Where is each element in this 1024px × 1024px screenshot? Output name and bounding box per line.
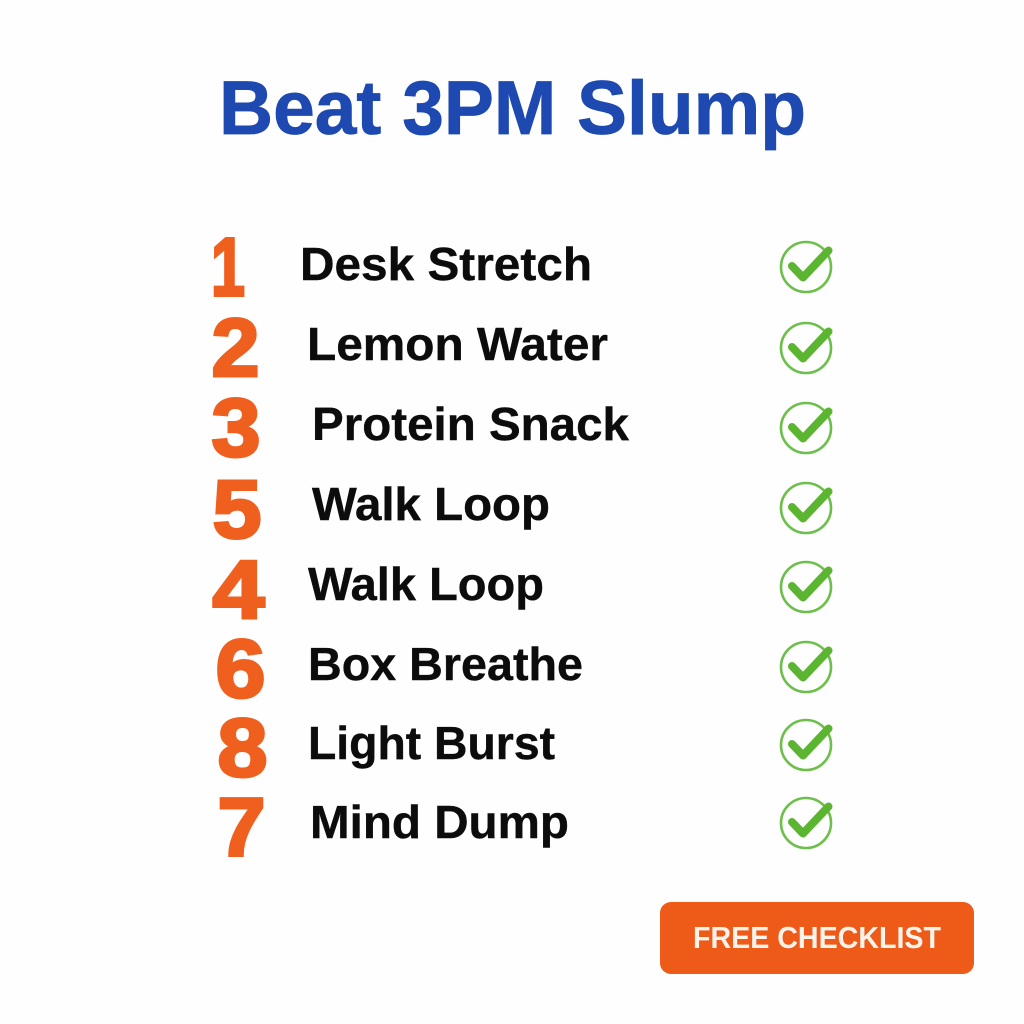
list row 8: Mind Dump: 7 (218, 780, 266, 874)
list row 7: Light Burst: Light Burst (308, 717, 555, 769)
button: free checklist (660, 902, 974, 974)
list row 4: Walk Loop: Walk Loop (312, 478, 550, 530)
list row 2: Lemon Water (212, 301, 831, 394)
list row 7: Light Burst: 8 (218, 701, 268, 794)
list row 3: Protein Snack: Protein Snack (312, 398, 629, 450)
title: Beat 3PM Slump (219, 66, 806, 151)
list row 3: Protein Snack (212, 381, 831, 474)
list row 2: Lemon Water: 2 (212, 301, 260, 394)
list row 8: Mind Dump: Mind Dump (310, 796, 569, 848)
list row 8: Mind Dump (218, 780, 831, 874)
list row 6: Box Breathe (216, 622, 831, 715)
list row 4: Walk Loop: 5 (212, 462, 262, 556)
list row 4: Walk Loop (212, 462, 831, 556)
list row 1: Desk Stretch: Desk Stretch (300, 238, 592, 290)
list row 6: Box Breathe: Box Breathe (308, 638, 583, 690)
list row 5: Walk Loop: 4 (212, 543, 264, 636)
list row 5: Walk Loop (212, 543, 831, 636)
button: free checklist: FREE CHECKLIST (693, 920, 941, 955)
list row 6: Box Breathe: 6 (216, 622, 266, 715)
list row 2: Lemon Water: Lemon Water (307, 318, 608, 370)
list row 1: Desk Stretch: 1 (211, 220, 245, 314)
list row 5: Walk Loop: Walk Loop (308, 558, 544, 610)
list row 7: Light Burst (218, 701, 831, 794)
list row 3: Protein Snack: 3 (212, 381, 260, 474)
list row 1: Desk Stretch (211, 220, 831, 314)
